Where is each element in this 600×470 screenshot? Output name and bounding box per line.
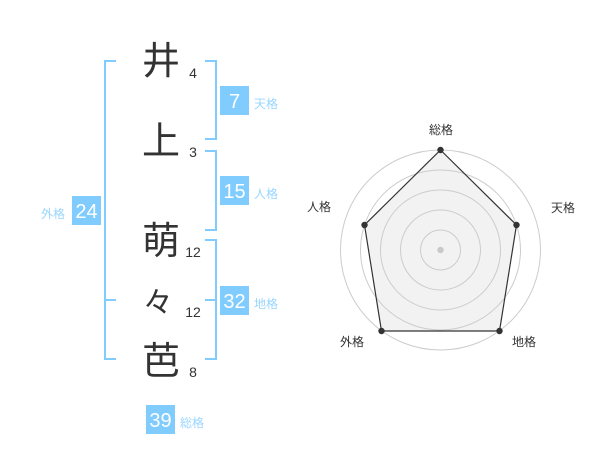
stroke count: 12: 12: [185, 304, 201, 320]
kanji: 芭: 芭: [142, 341, 180, 383]
label: 天格: 天格: [254, 97, 278, 111]
label: 地格: 地格: [254, 297, 278, 311]
axis label: 地格: 地格: [512, 335, 536, 349]
badge: 外格 24: [72, 196, 101, 225]
stroke count: 12: 12: [185, 244, 201, 260]
axis label: 総格: 総格: [429, 123, 453, 137]
kanji: 井: 井: [142, 41, 180, 83]
badge: 天格 7: [220, 86, 249, 115]
stroke count: 8: 8: [189, 364, 197, 380]
badge: 地格 32: 32: [223, 291, 246, 313]
badge: 総格 39: [146, 405, 175, 434]
radar outline: [364, 150, 516, 331]
kanji: 萌: 萌: [142, 221, 180, 263]
stroke count: 4: 4: [189, 65, 197, 81]
label: 総格: 総格: [180, 416, 204, 430]
badge: 人格 15: [220, 176, 249, 205]
label: 外格: 外格: [41, 207, 65, 221]
axis label: 天格: 天格: [551, 201, 575, 215]
radar fill: [364, 150, 516, 331]
stroke count: 3: 3: [189, 144, 197, 160]
radar points: [361, 147, 520, 334]
axis label: 人格: 人格: [307, 200, 331, 214]
badge: 外格 24: 24: [75, 201, 98, 223]
badge: 地格 32: [220, 286, 249, 315]
kanji: 々: 々: [143, 278, 173, 322]
label: 人格: 人格: [254, 187, 278, 201]
kanji: 上: 上: [142, 121, 180, 163]
radar centre dot: [437, 247, 444, 253]
badge: 天格 7: 7: [229, 91, 240, 113]
badge: 総格 39: 39: [149, 410, 172, 432]
badge: 人格 15: 15: [223, 181, 246, 203]
axis label: 外格: 外格: [340, 335, 364, 349]
